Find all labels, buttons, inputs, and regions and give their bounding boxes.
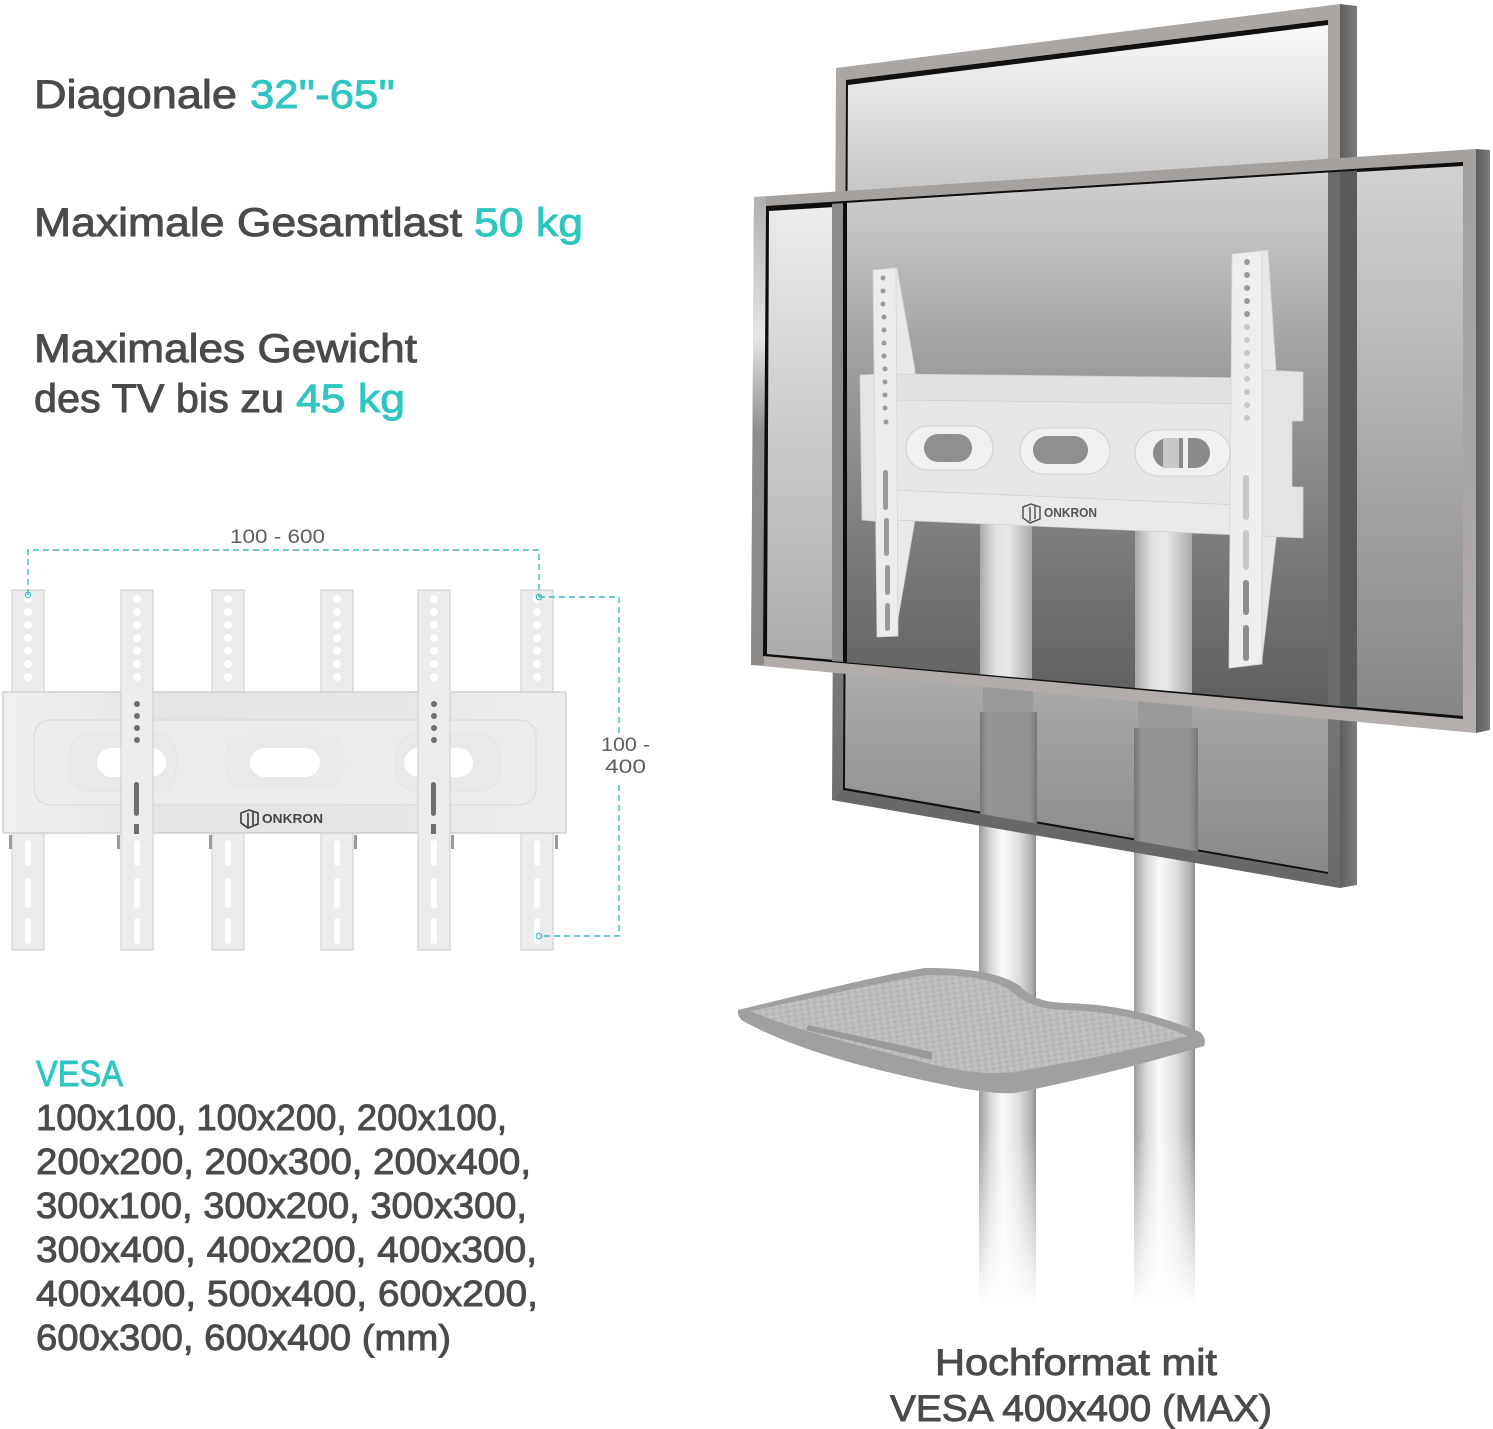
- heading: diagonal size: 32''-65'': [250, 73, 395, 117]
- heading: diagonal size: Diagonale: [34, 73, 237, 117]
- TV: landscape front screen: [751, 149, 1490, 733]
- stand poles: [970, 780, 1205, 1310]
- wall mount bracket on TV: [860, 250, 1303, 668]
- heading: maximum total load: Maximale Gesamtlast: [34, 201, 462, 245]
- text block: VESA sizes: 300x100, 300x200, 300x300,: [36, 1185, 527, 1226]
- front bracket strips: [9, 590, 558, 950]
- text block: VESA sizes: 400x400, 500x400, 600x200,: [36, 1273, 538, 1314]
- text block: VESA sizes: 100x100, 100x200, 200x100,: [36, 1097, 507, 1138]
- dimension line: width: [25, 527, 539, 598]
- dimension line: height: 400: [605, 757, 646, 778]
- text block: VESA sizes: [36, 1053, 538, 1358]
- text block: VESA sizes: VESA: [36, 1053, 123, 1094]
- TV: portrait back screen: [832, 4, 1357, 888]
- overlap of the two screens: [832, 150, 1357, 730]
- logo: Onkron on mount: ONKRON: [1044, 505, 1097, 520]
- heading: diagonal size: [34, 73, 395, 117]
- mount right strip: [1229, 251, 1262, 668]
- heading: maximum total load: 50 kg: [474, 201, 583, 245]
- back TV bottom edge over sleeves: [832, 790, 1340, 888]
- text block: VESA sizes: 200x200, 200x300, 200x400,: [36, 1141, 531, 1182]
- caption: portrait format: VESA 400x400 (MAX): [890, 1388, 1272, 1429]
- caption: portrait format: [890, 1342, 1272, 1429]
- stand sleeves behind screen: [980, 680, 1198, 858]
- heading: maximum TV weight: 45 kg: [296, 377, 405, 421]
- text block: VESA sizes: 300x400, 400x200, 400x300,: [36, 1229, 537, 1270]
- dimension line: height: [536, 594, 650, 939]
- logo: Onkron on mount: [1023, 504, 1097, 523]
- mount strip wings: [888, 250, 1278, 662]
- heading: maximum TV weight: des TV bis zu: [34, 377, 284, 421]
- text block: VESA sizes: 600x300, 600x400 (mm): [36, 1317, 451, 1358]
- mount left strip: [873, 268, 898, 637]
- logo: Onkron: [241, 810, 323, 828]
- upper stand poles seen through screen: [980, 524, 1192, 693]
- dimension line: height: 100 -: [601, 735, 650, 756]
- heading: maximum TV weight: Maximales Gewicht: [34, 327, 417, 371]
- caption: portrait format: Hochformat mit: [935, 1342, 1218, 1383]
- shelf: [738, 968, 1205, 1093]
- mount plate: [895, 374, 1262, 536]
- mount side tabs: [860, 370, 1303, 538]
- mounting plate: [3, 692, 566, 833]
- logo: Onkron: ONKRON: [262, 811, 323, 826]
- heading: maximum TV weight: [34, 327, 417, 421]
- dimension line: width: 100 - 600: [230, 527, 325, 548]
- diagram: adjustable VESA bracket: [3, 527, 650, 950]
- rear bracket strips: [12, 590, 553, 950]
